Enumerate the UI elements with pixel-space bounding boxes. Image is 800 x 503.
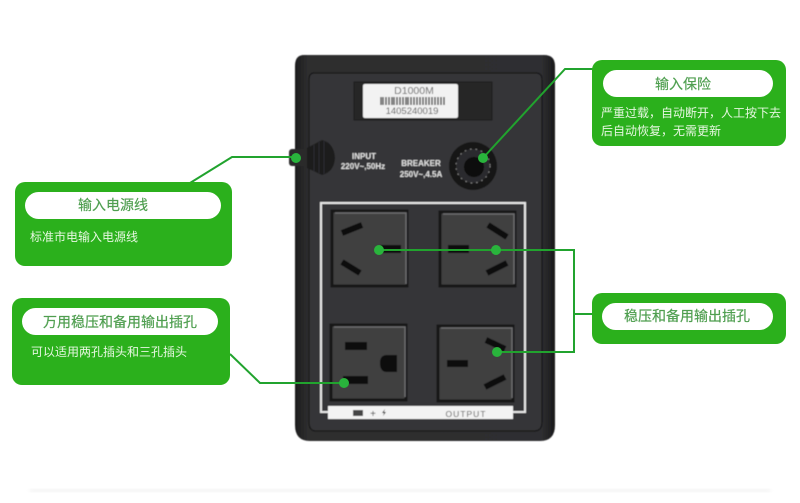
description xyxy=(601,105,781,138)
heading pill xyxy=(25,192,221,219)
leader line: universal outlet xyxy=(230,354,349,388)
output strip xyxy=(328,406,513,420)
output strip: OUTPUT xyxy=(446,409,486,419)
socket top left xyxy=(332,211,407,286)
device outer casing xyxy=(295,55,555,441)
panel: regulated outlets xyxy=(592,293,786,344)
description: 后自动恢复，无需更新 xyxy=(601,123,721,138)
input rating text: INPUT xyxy=(352,152,376,161)
panel: input fuse xyxy=(592,60,786,146)
heading: 输入电源线 xyxy=(78,197,148,213)
breaker rating text xyxy=(400,159,442,179)
leader line: breaker xyxy=(478,69,593,163)
description: 严重过载，自动断开，人工按下去 xyxy=(601,105,781,120)
UPS device rear xyxy=(289,55,555,441)
heading pill xyxy=(22,308,218,335)
model label xyxy=(354,82,492,120)
leader line: input cord xyxy=(190,153,301,183)
barcode xyxy=(381,97,444,105)
output frame xyxy=(321,203,525,412)
leader line: regulated outlets xyxy=(374,245,593,357)
heading pill xyxy=(602,303,773,330)
description: 可以适用两孔插头和三孔插头 xyxy=(31,345,187,359)
panel: input power cord xyxy=(15,182,232,266)
socket bottom left xyxy=(331,325,406,400)
power cord xyxy=(289,140,335,175)
model label: 1405240019 xyxy=(386,106,438,117)
panel: universal outlet xyxy=(12,298,230,385)
heading: 万用稳压和备用输出插孔 xyxy=(43,314,197,330)
breaker knob xyxy=(449,142,497,190)
input rating text: 220V~,50Hz xyxy=(341,162,385,171)
breaker rating text: BREAKER xyxy=(401,159,441,168)
output strip: + xyxy=(370,409,376,420)
heading pill xyxy=(603,70,773,97)
input rating text xyxy=(341,152,385,171)
model label: D1000M xyxy=(394,85,434,97)
breaker rating text: 250V~,4.5A xyxy=(400,170,442,179)
heading: 稳压和备用输出插孔 xyxy=(624,308,750,324)
heading: 输入保险 xyxy=(655,76,711,92)
socket bottom right xyxy=(438,326,513,401)
ground shadow xyxy=(30,489,770,492)
socket top right xyxy=(440,212,515,286)
device recessed panel xyxy=(309,73,542,431)
description: 标准市电输入电源线 xyxy=(30,229,138,244)
